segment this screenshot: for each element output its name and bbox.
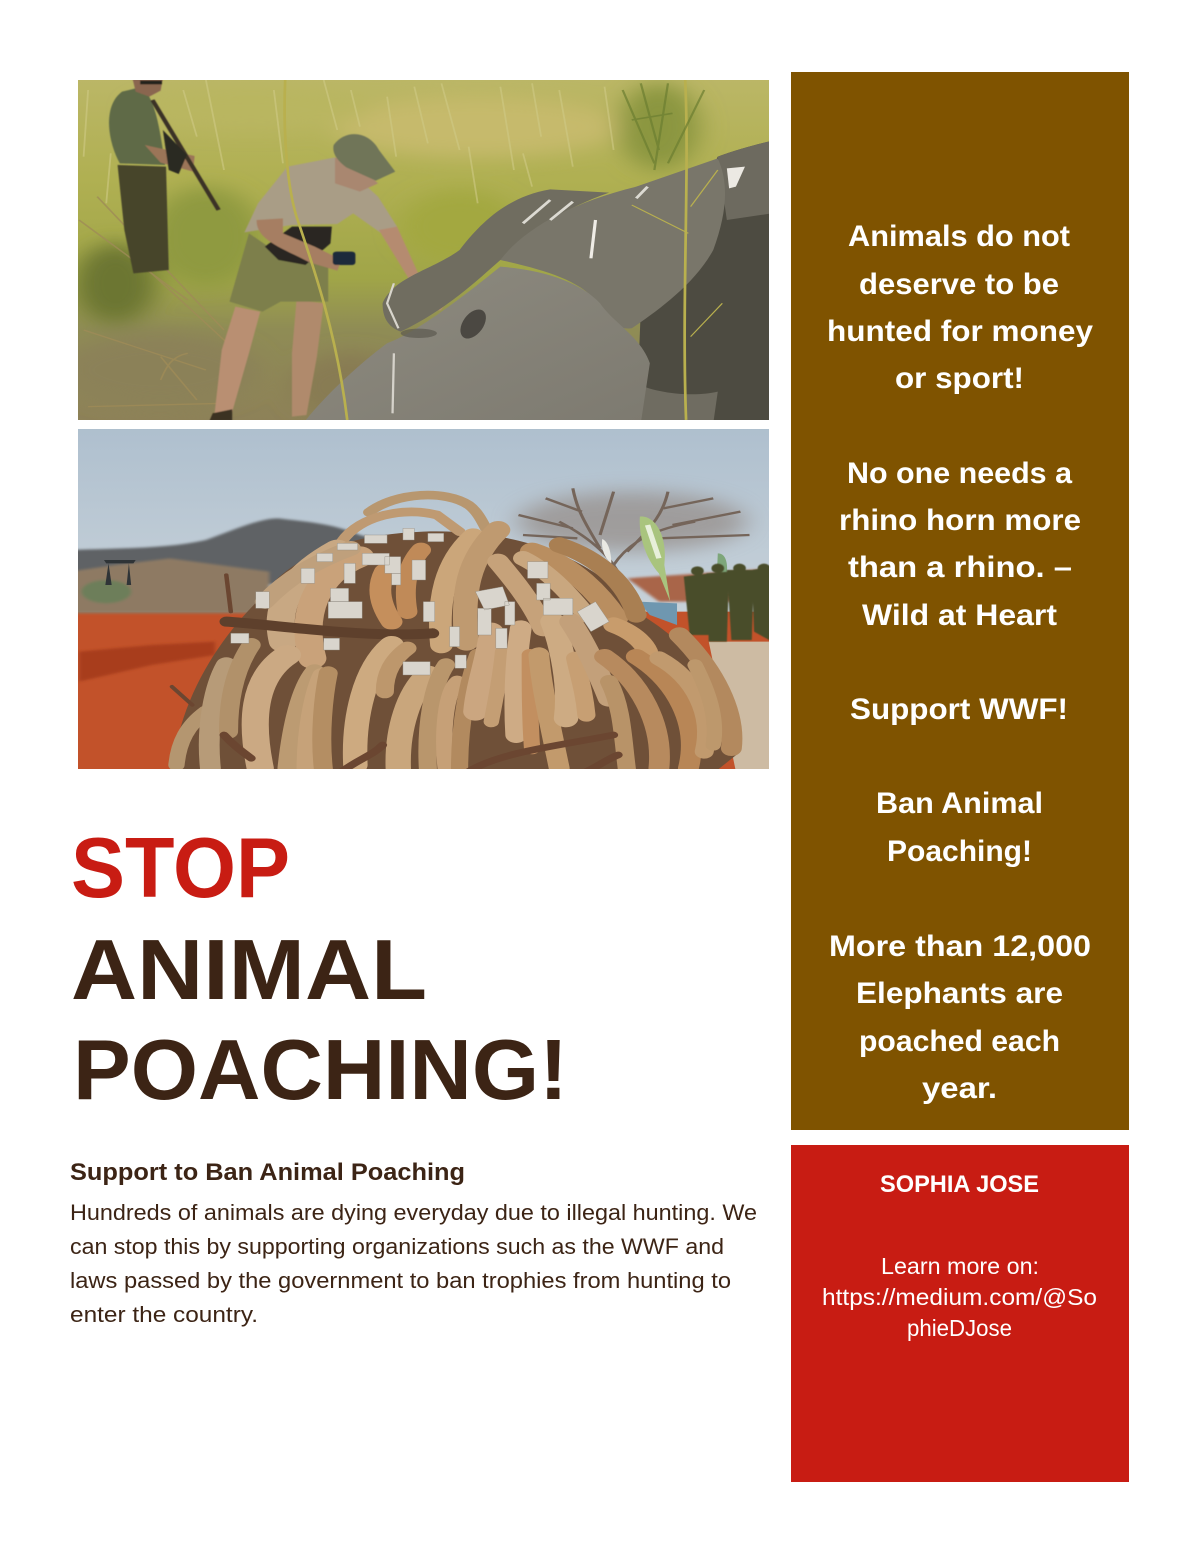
body paragraph: laws passed by the government to ban trophies from hunting to bbox=[70, 1268, 731, 1293]
learn more link: phieDJose bbox=[907, 1315, 1012, 1341]
statistic: elephants poached bbox=[829, 930, 1091, 1105]
panel: brown message sidebar bbox=[791, 72, 1129, 1130]
title word: POACHING!: POACHING! bbox=[73, 1023, 568, 1118]
message: animals do not deserve: Animals do not bbox=[848, 220, 1070, 253]
body paragraph bbox=[70, 1200, 757, 1327]
branch band bbox=[226, 622, 432, 634]
photo: pile of confiscated elephant tusks bbox=[70, 425, 777, 778]
learn more link: Learn more on: bbox=[881, 1253, 1039, 1279]
message: ban animal poaching bbox=[876, 787, 1043, 868]
subheading: Support to Ban Animal Poaching bbox=[70, 1159, 465, 1186]
message: animals do not deserve: deserve to be bbox=[859, 268, 1059, 301]
quote: rhino horn: Wild at Heart bbox=[862, 599, 1057, 632]
quote: rhino horn: No one needs a bbox=[847, 457, 1072, 490]
ranger in cap bbox=[210, 134, 450, 421]
title word: STOP: STOP bbox=[71, 821, 290, 916]
body paragraph: can stop this by supporting organizations such as the WWF and bbox=[70, 1234, 724, 1259]
sky bbox=[78, 429, 769, 612]
title: STOP ANIMAL POACHING! bbox=[71, 821, 568, 1118]
photo: ranger inspecting a dead elephant bbox=[61, 70, 777, 430]
acacia tree bbox=[516, 488, 750, 582]
message: support WWF: Support WWF! bbox=[850, 693, 1068, 726]
quote: rhino horn bbox=[839, 457, 1081, 632]
foreground reeds bbox=[285, 80, 722, 420]
title word: ANIMAL: ANIMAL bbox=[71, 923, 427, 1018]
quote: rhino horn: than a rhino. – bbox=[848, 551, 1072, 584]
green banners bbox=[602, 517, 727, 602]
wrapped ivory blocks bbox=[231, 528, 609, 675]
lower layer bbox=[176, 712, 206, 765]
statistic: elephants poached: poached each bbox=[859, 1025, 1060, 1058]
soldier with rifle bbox=[109, 79, 219, 273]
learn more link bbox=[822, 1253, 1097, 1341]
message: ban animal poaching: Ban Animal bbox=[876, 787, 1043, 820]
elephant bbox=[303, 141, 777, 423]
body paragraph: Hundreds of animals are dying everyday due to illegal hunting. We bbox=[70, 1200, 757, 1225]
bushes and shelter bbox=[70, 558, 269, 682]
body paragraph: enter the country. bbox=[70, 1302, 258, 1327]
author name: SOPHIA JOSE bbox=[880, 1171, 1039, 1198]
top arcs bbox=[369, 495, 486, 528]
grass background bbox=[61, 70, 777, 430]
statistic: elephants poached: More than 12,000 bbox=[829, 930, 1091, 963]
tusk pile bbox=[172, 495, 740, 773]
message: animals do not deserve bbox=[827, 220, 1093, 395]
message: animals do not deserve: or sport! bbox=[895, 362, 1024, 395]
message: animals do not deserve: hunted for money bbox=[827, 315, 1093, 348]
hill bbox=[78, 516, 364, 586]
statistic: elephants poached: year. bbox=[922, 1072, 997, 1105]
message: ban animal poaching: Poaching! bbox=[887, 835, 1032, 868]
uniformed soldiers bbox=[684, 564, 772, 642]
learn more link: https://medium.com/@So bbox=[822, 1284, 1097, 1310]
statistic: elephants poached: Elephants are bbox=[856, 977, 1063, 1010]
quote: rhino horn: rhino horn more bbox=[839, 504, 1081, 537]
dark roots at base bbox=[172, 575, 618, 772]
ground bbox=[70, 612, 777, 778]
upper layer bbox=[281, 550, 337, 642]
panel: red author box bbox=[791, 1145, 1129, 1482]
